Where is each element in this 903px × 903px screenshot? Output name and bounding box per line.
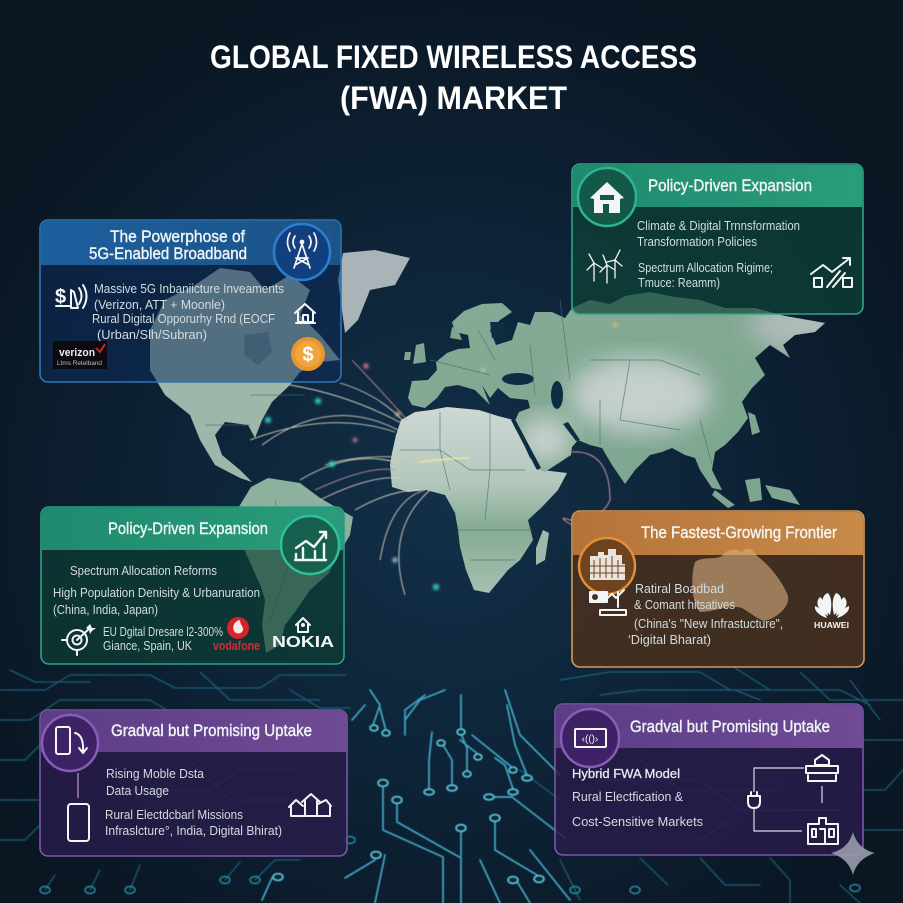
text: EU digital decade — [103, 624, 223, 653]
greenland — [338, 250, 410, 333]
title: (FWA) MARKET — [340, 80, 567, 116]
south america — [237, 478, 353, 653]
panel: fastest-growing frontier — [572, 511, 864, 667]
logo: huawei: HUAWEI — [814, 621, 849, 630]
icon: hybrid module — [561, 709, 619, 767]
logo: verizon: Ltms Retelband — [57, 361, 102, 367]
icon: investment signal — [55, 285, 86, 308]
icon: investment signal: $ — [55, 286, 66, 308]
text: spectrum — [638, 260, 773, 290]
title — [210, 39, 697, 116]
text: EU digital decade: EU Dgital Dresare l2-300% — [103, 624, 223, 639]
text: spectrum and population: Spectrum Allocation Reforms — [70, 563, 217, 578]
text: hybrid model — [572, 766, 703, 829]
heading: The Fastest-Growing Frontier — [641, 523, 837, 542]
text: investments: (Verizon, ATT + Moonle) — [94, 297, 225, 312]
icon: house — [295, 304, 315, 323]
panel background — [40, 710, 347, 856]
text: spectrum and population: (China, India, Japan) — [53, 602, 158, 617]
text: hybrid model: Cost-Sensitive Markets — [572, 814, 703, 829]
icon: target — [62, 624, 96, 655]
traces seen through the purple panels — [130, 770, 300, 790]
heading: Policy-Driven Expansion — [108, 519, 268, 538]
text: mobile data: Data Usage — [106, 783, 169, 798]
heading — [89, 227, 247, 263]
logo: vodafone — [213, 617, 260, 653]
glow dots — [265, 323, 617, 590]
text: investments — [92, 281, 284, 342]
text: EU digital decade: Giance, Spain, UK — [103, 638, 192, 653]
circuit board pattern — [0, 668, 903, 903]
north america — [150, 268, 340, 482]
icon: phone with data — [42, 715, 98, 771]
text: initiatives: & Comant hitsatives — [634, 597, 735, 612]
text: investments: (Urban/Slh/Subran) — [97, 327, 207, 342]
panel background — [555, 704, 863, 855]
panel: gradual uptake (left) — [40, 710, 347, 856]
panel: policy-driven expansion (left) — [41, 507, 344, 664]
panel background — [40, 220, 341, 382]
text: climate policies — [637, 218, 800, 249]
logo: nokia: NOKIA — [272, 634, 335, 651]
icon: broadband and charts — [589, 590, 626, 615]
icon: dollar coin: $ — [302, 344, 314, 366]
eurasia — [408, 292, 825, 490]
text: spectrum: Spectrum Allocation Rigime; — [638, 260, 773, 275]
heading: Gradval but Promising Uptake — [630, 717, 830, 736]
panel background — [572, 164, 863, 314]
text: spectrum and population — [53, 563, 260, 617]
icon: dollar coin — [291, 337, 325, 371]
panel: gradual uptake (right) — [555, 704, 863, 855]
text: hybrid model: Rural Electfication & — [572, 789, 683, 804]
icon: bar chart — [281, 516, 339, 574]
icon: sparkle — [831, 832, 875, 875]
icon: cell tower — [274, 224, 330, 280]
islands — [404, 327, 800, 518]
panel background — [572, 511, 864, 667]
connector — [77, 773, 79, 798]
text: mobile data — [106, 766, 205, 798]
text: investments: Rural Digital Opporurhy Rnd (EOCF — [92, 311, 275, 326]
panel background — [41, 507, 344, 664]
heading: Gradval but Promising Uptake — [111, 721, 312, 740]
icon: city — [579, 538, 635, 594]
text: climate policies: Climate & Digital Trnnsformation — [637, 218, 800, 233]
icon: wind turbines — [587, 250, 622, 283]
icon: hybrid module: ‹(()› — [582, 734, 598, 745]
borders — [205, 300, 712, 620]
text: rural missions: Infraslcture°, India, Digital Bhirat) — [105, 823, 282, 838]
icon: houses — [289, 794, 331, 816]
logo: nokia — [272, 618, 335, 651]
text: rural missions — [105, 807, 282, 838]
heading: 5G-Enabled Broadband — [89, 244, 247, 263]
text: mobile data: Rising Moble Dsta — [106, 766, 205, 781]
panel: policy-driven expansion (top right) — [572, 164, 863, 314]
text: initiatives: (China's "New Infrastucture", — [634, 616, 783, 631]
text: rural missions: Rural Electdcbarl Missions — [105, 807, 243, 822]
africa — [390, 407, 567, 593]
text: investments: Massive 5G Inbaniicture Inveaments — [94, 281, 284, 296]
inland seas — [244, 322, 580, 470]
data arcs — [250, 360, 610, 595]
world map — [150, 250, 850, 653]
text: climate policies: Transformation Policies — [637, 234, 757, 249]
diagram: hybrid connection — [748, 755, 838, 844]
logo: verizon: verizon — [59, 347, 95, 359]
text: initiatives — [628, 581, 783, 647]
icon: house — [578, 168, 636, 226]
text: spectrum: Tmuce: Reamm) — [638, 275, 720, 290]
title: GLOBAL FIXED WIRELESS ACCESS — [210, 39, 697, 75]
text: spectrum and population: High Population Denisity & Urbanuration — [53, 585, 260, 600]
text: initiatives: Ratiral Boadbad — [635, 581, 724, 596]
icon: phone — [68, 804, 89, 841]
logo: verizon — [53, 341, 107, 369]
heading: Policy-Driven Expansion — [648, 176, 812, 195]
text: hybrid model: Hybrid FWA Model — [572, 766, 680, 781]
text: initiatives: ‘Digital Bharat) — [628, 632, 711, 647]
panel: 5G-enabled broadband — [40, 220, 341, 382]
australia seen through panel — [692, 549, 788, 621]
logo: huawei — [814, 593, 849, 630]
madagascar — [536, 530, 549, 565]
heading: The Powerphose of — [110, 227, 245, 246]
icon: growth chart — [811, 258, 852, 287]
logo: vodafone: vodafone — [213, 638, 260, 653]
